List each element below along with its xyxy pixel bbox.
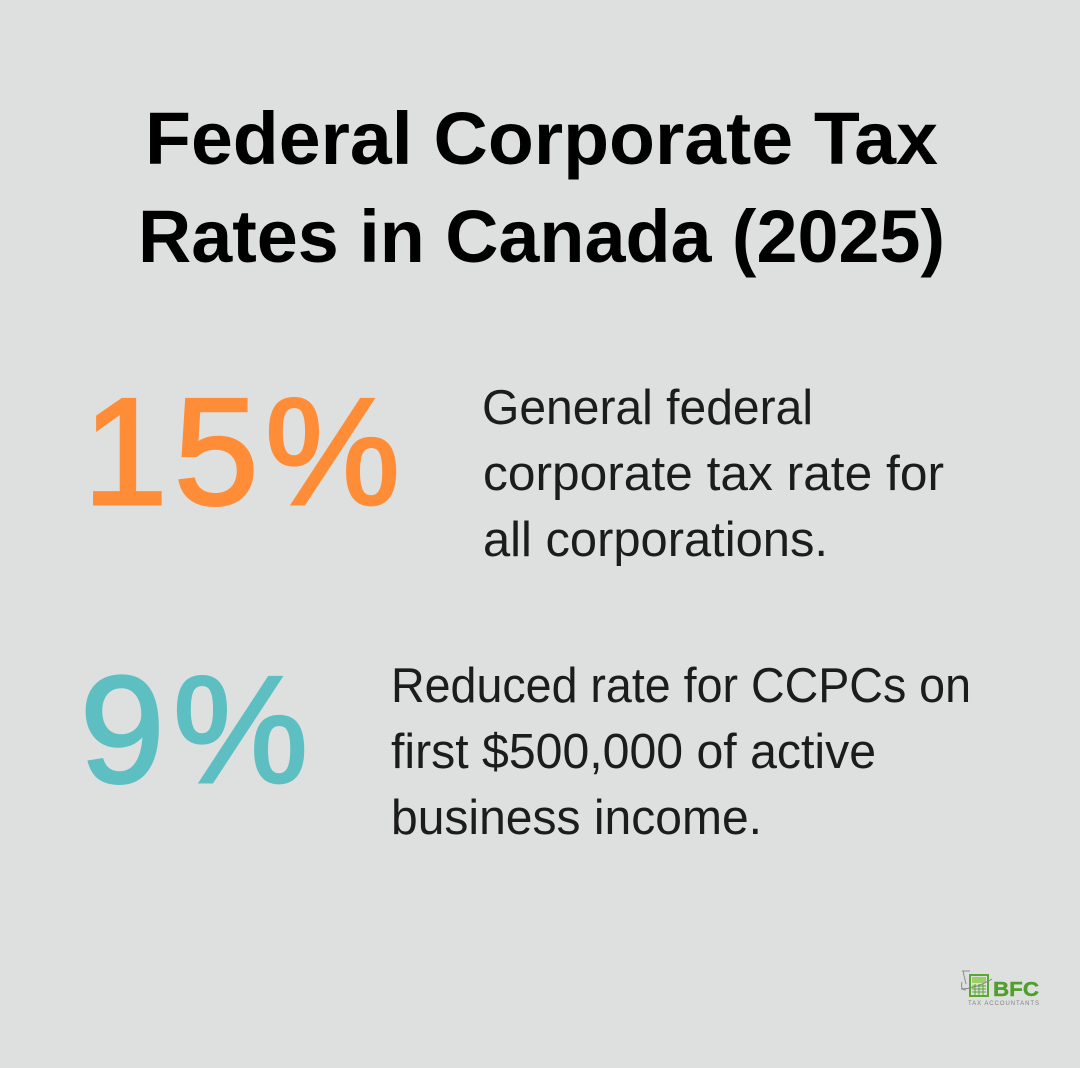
title <box>138 97 945 278</box>
text: general rate description <box>482 381 944 567</box>
text: general rate description: General federal <box>482 381 813 435</box>
text: general rate description: corporate tax rate for <box>483 447 944 501</box>
text: general rate description: all corporations. <box>483 513 828 567</box>
text: reduced rate description <box>391 659 971 845</box>
text: reduced rate description: first $500,000 of active <box>391 725 876 779</box>
stat: 9%: 9% <box>80 645 308 815</box>
text: reduced rate description: business income. <box>391 791 762 845</box>
title: Federal Corporate Tax <box>145 97 938 180</box>
logo: BFC Tax Accountants: TAX ACCOUNTANTS <box>968 1001 1039 1007</box>
logo: BFC Tax Accountants <box>961 971 1039 1007</box>
text: reduced rate description: Reduced rate for CCPCs on <box>391 659 971 713</box>
title: Rates in Canada (2025) <box>138 195 945 278</box>
logo: BFC Tax Accountants: BFC <box>993 979 1039 1001</box>
stat: 15%: 15% <box>83 367 400 537</box>
